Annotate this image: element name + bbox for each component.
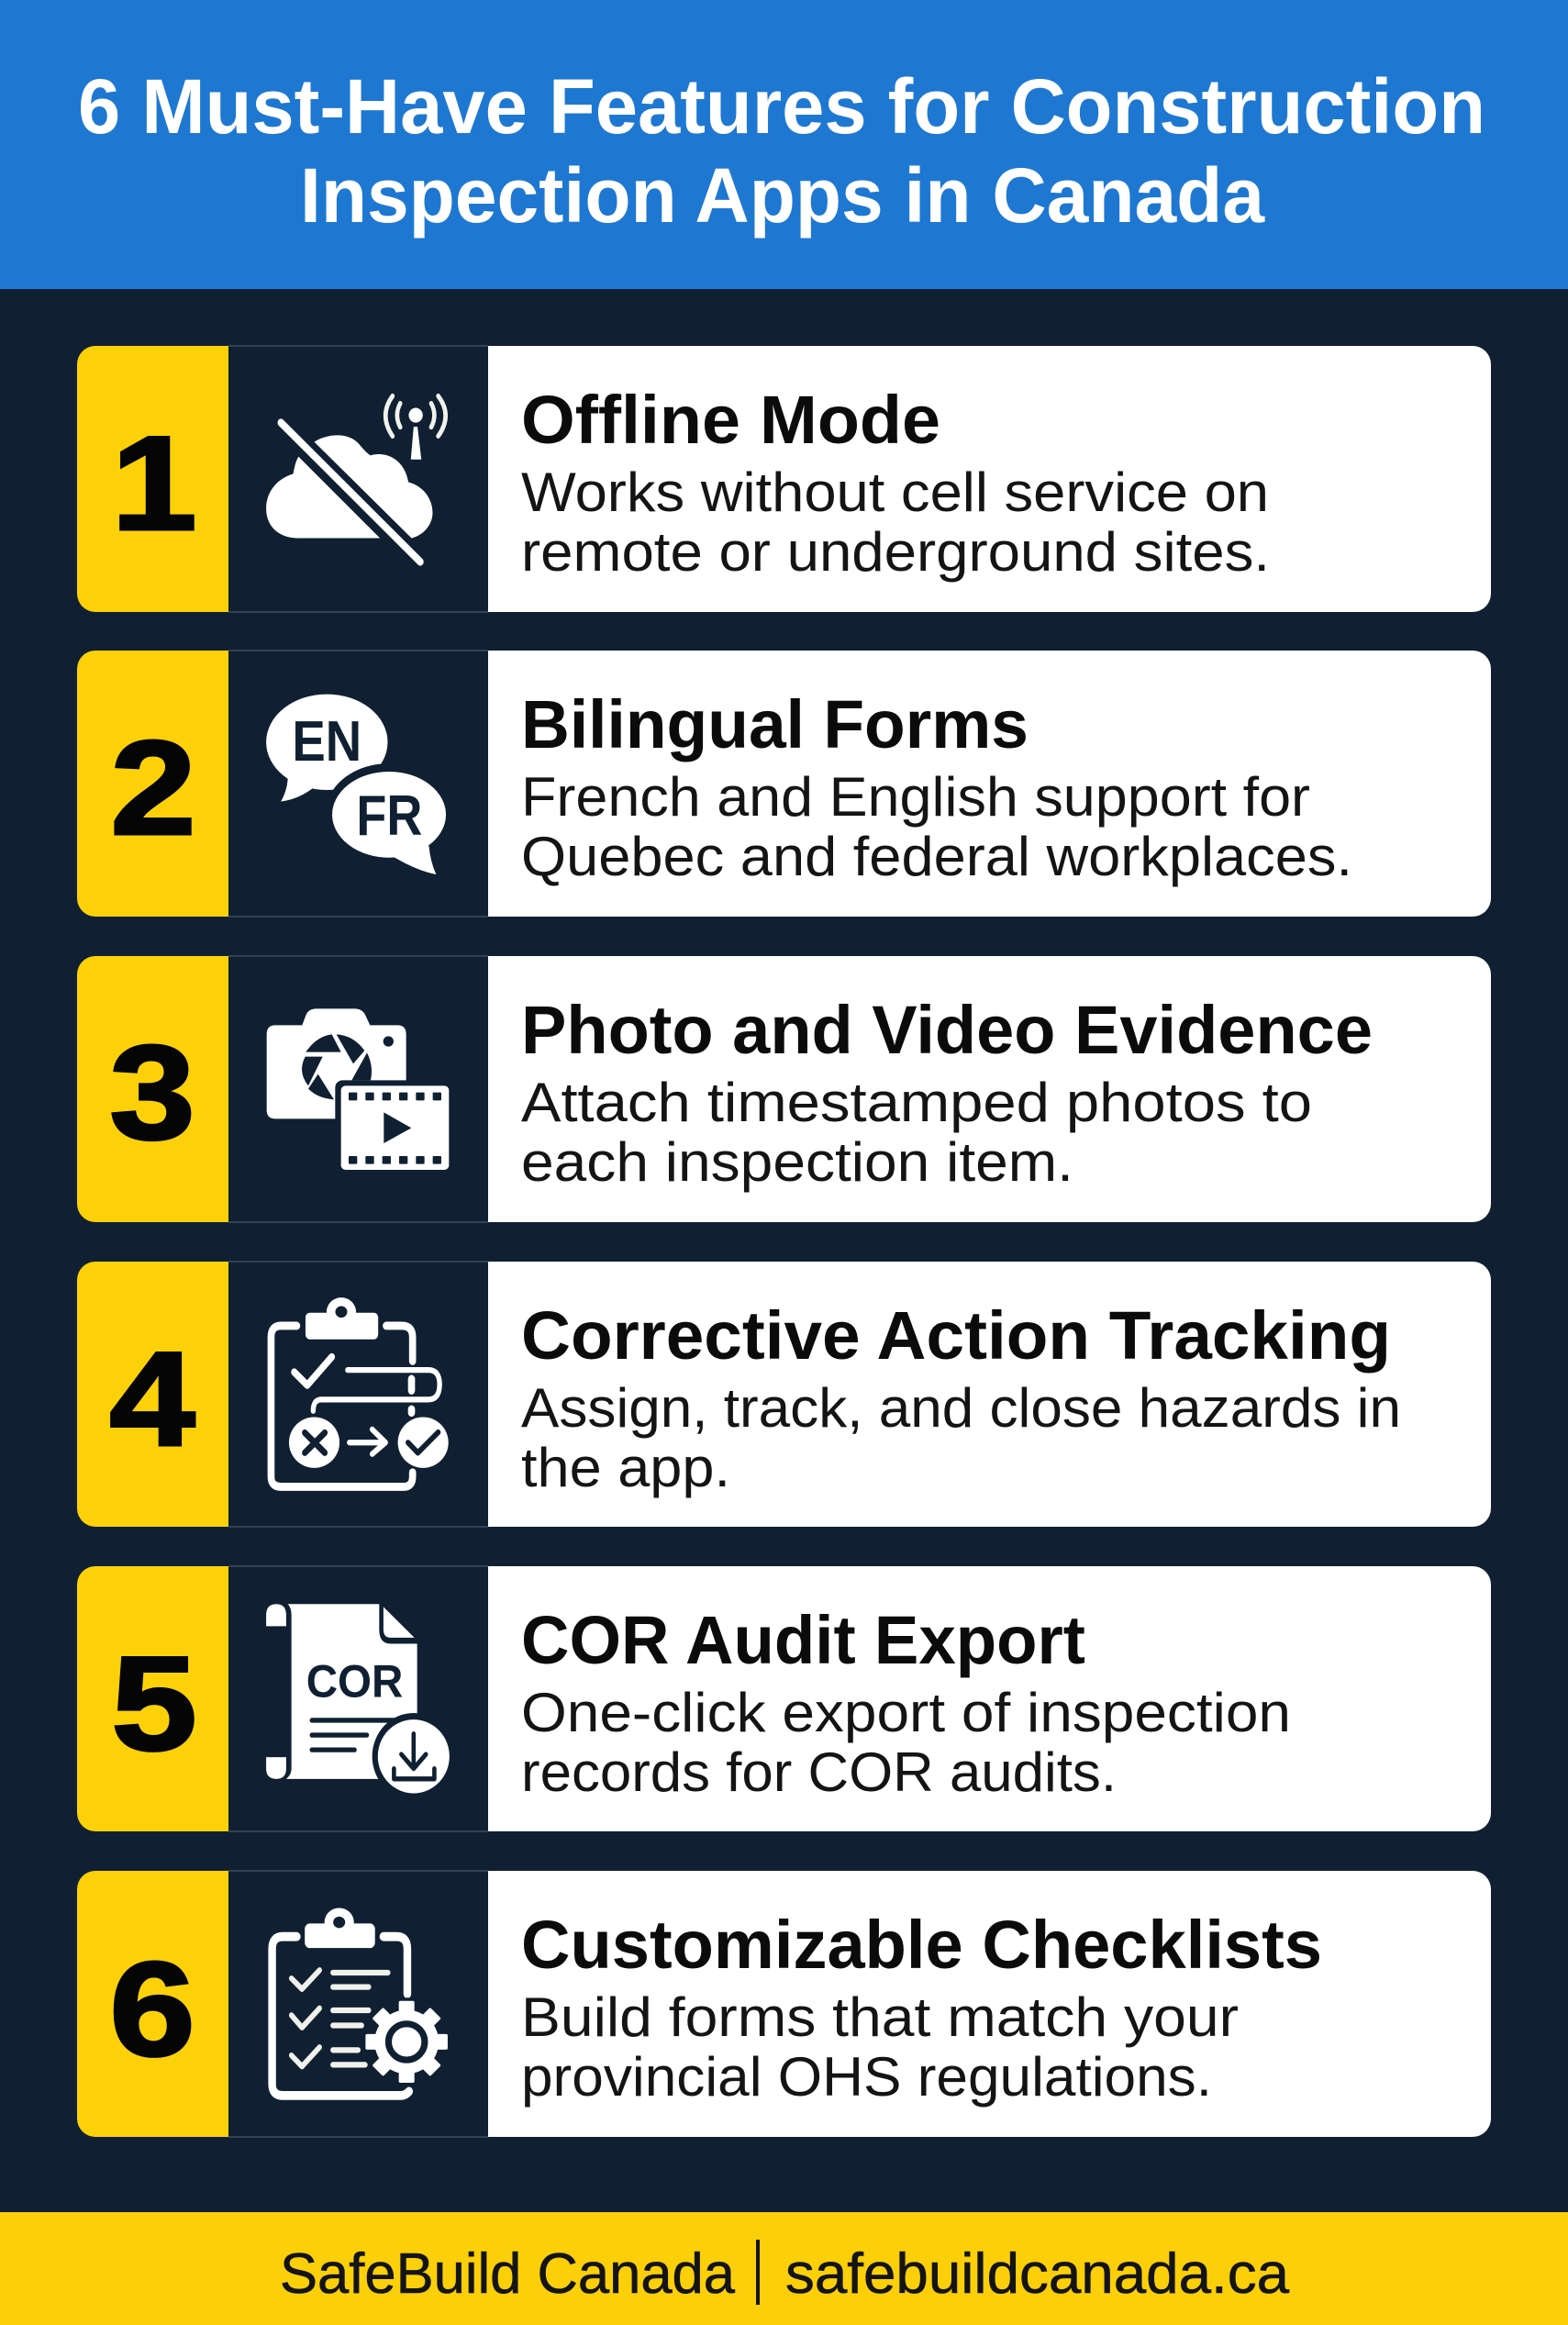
- number badge 2: [77, 651, 228, 917]
- footer text: SafeBuild Canada: [280, 2242, 736, 2306]
- feature row 6: Customizable Checklists: [77, 1871, 1491, 2137]
- feature row 5: COR Audit Export: [77, 1566, 1491, 1831]
- icon: COR document download: COR: [306, 1655, 403, 1707]
- feature row 1: Offline Mode: [77, 346, 1491, 612]
- text card 4: [488, 1262, 1491, 1527]
- number badge 5: 5: [111, 1630, 197, 1779]
- icon: corrective action clipboard: [271, 1297, 449, 1486]
- text card 4: Corrective Action Tracking: [521, 1297, 1391, 1374]
- number badge 3: [77, 956, 228, 1222]
- number badge 1: [77, 346, 228, 612]
- text card 2: Bilingual Forms: [521, 686, 1029, 762]
- number badge 2: 2: [110, 714, 196, 863]
- footer text: [280, 2240, 1290, 2306]
- text card 5: COR Audit Export: [521, 1602, 1085, 1678]
- text card 6: [488, 1871, 1491, 2137]
- text card 3: each inspection item.: [521, 1131, 1073, 1193]
- icon: cloud offline with antenna: [266, 396, 446, 562]
- text card 1: Works without cell service on: [521, 462, 1269, 523]
- text card 3: [488, 956, 1491, 1222]
- number badge 3: 3: [109, 1018, 195, 1168]
- text card 5: One-click export of inspection: [521, 1682, 1291, 1743]
- number badge 1: 1: [111, 409, 197, 559]
- text card 5: records for COR audits.: [521, 1741, 1117, 1803]
- text card 1: Offline Mode: [521, 382, 940, 458]
- header banner: [0, 0, 1568, 289]
- text card 6: Customizable Checklists: [521, 1907, 1322, 1983]
- icon: EN FR speech bubbles: EN: [292, 709, 361, 773]
- icon: checklist clipboard with gear: [272, 1908, 451, 2096]
- number badge 5: [77, 1566, 228, 1831]
- feature row 2: Bilingual Forms: [77, 651, 1491, 917]
- number badge 6: 6: [109, 1935, 195, 2085]
- footer bar: [0, 2212, 1568, 2325]
- icon: camera and video: [267, 1008, 454, 1175]
- text card 2: Quebec and federal workplaces.: [521, 826, 1352, 887]
- title: [78, 63, 1485, 239]
- number badge 6: [77, 1871, 228, 2137]
- number badge 4: [77, 1262, 228, 1527]
- icon: EN FR speech bubbles: [266, 695, 450, 874]
- text card 1: [488, 346, 1491, 612]
- text card 3: Photo and Video Evidence: [521, 992, 1373, 1068]
- text card 4: the app.: [521, 1437, 730, 1498]
- title: Inspection Apps in Canada: [300, 152, 1265, 239]
- number badge 4: 4: [109, 1325, 195, 1474]
- text card 5: [488, 1566, 1491, 1831]
- text card 2: French and English support for: [521, 766, 1310, 828]
- text card 6: Build forms that match your: [521, 1986, 1239, 2048]
- footer text: safebuildcanada.ca: [785, 2242, 1290, 2306]
- text card 3: Attach timestamped photos to: [521, 1072, 1312, 1133]
- icon: COR document download: [266, 1604, 452, 1797]
- text card 1: remote or underground sites.: [521, 521, 1270, 583]
- text card 4: Assign, track, and close hazards in: [521, 1377, 1401, 1439]
- text card 6: provincial OHS regulations.: [521, 2046, 1212, 2108]
- title: 6 Must-Have Features for Construction: [78, 63, 1485, 150]
- feature row 4: Corrective Action Tracking: [77, 1262, 1491, 1527]
- icon: EN FR speech bubbles: FR: [356, 784, 422, 848]
- feature row 3: Photo and Video Evidence: [77, 956, 1491, 1222]
- text card 2: [488, 651, 1491, 917]
